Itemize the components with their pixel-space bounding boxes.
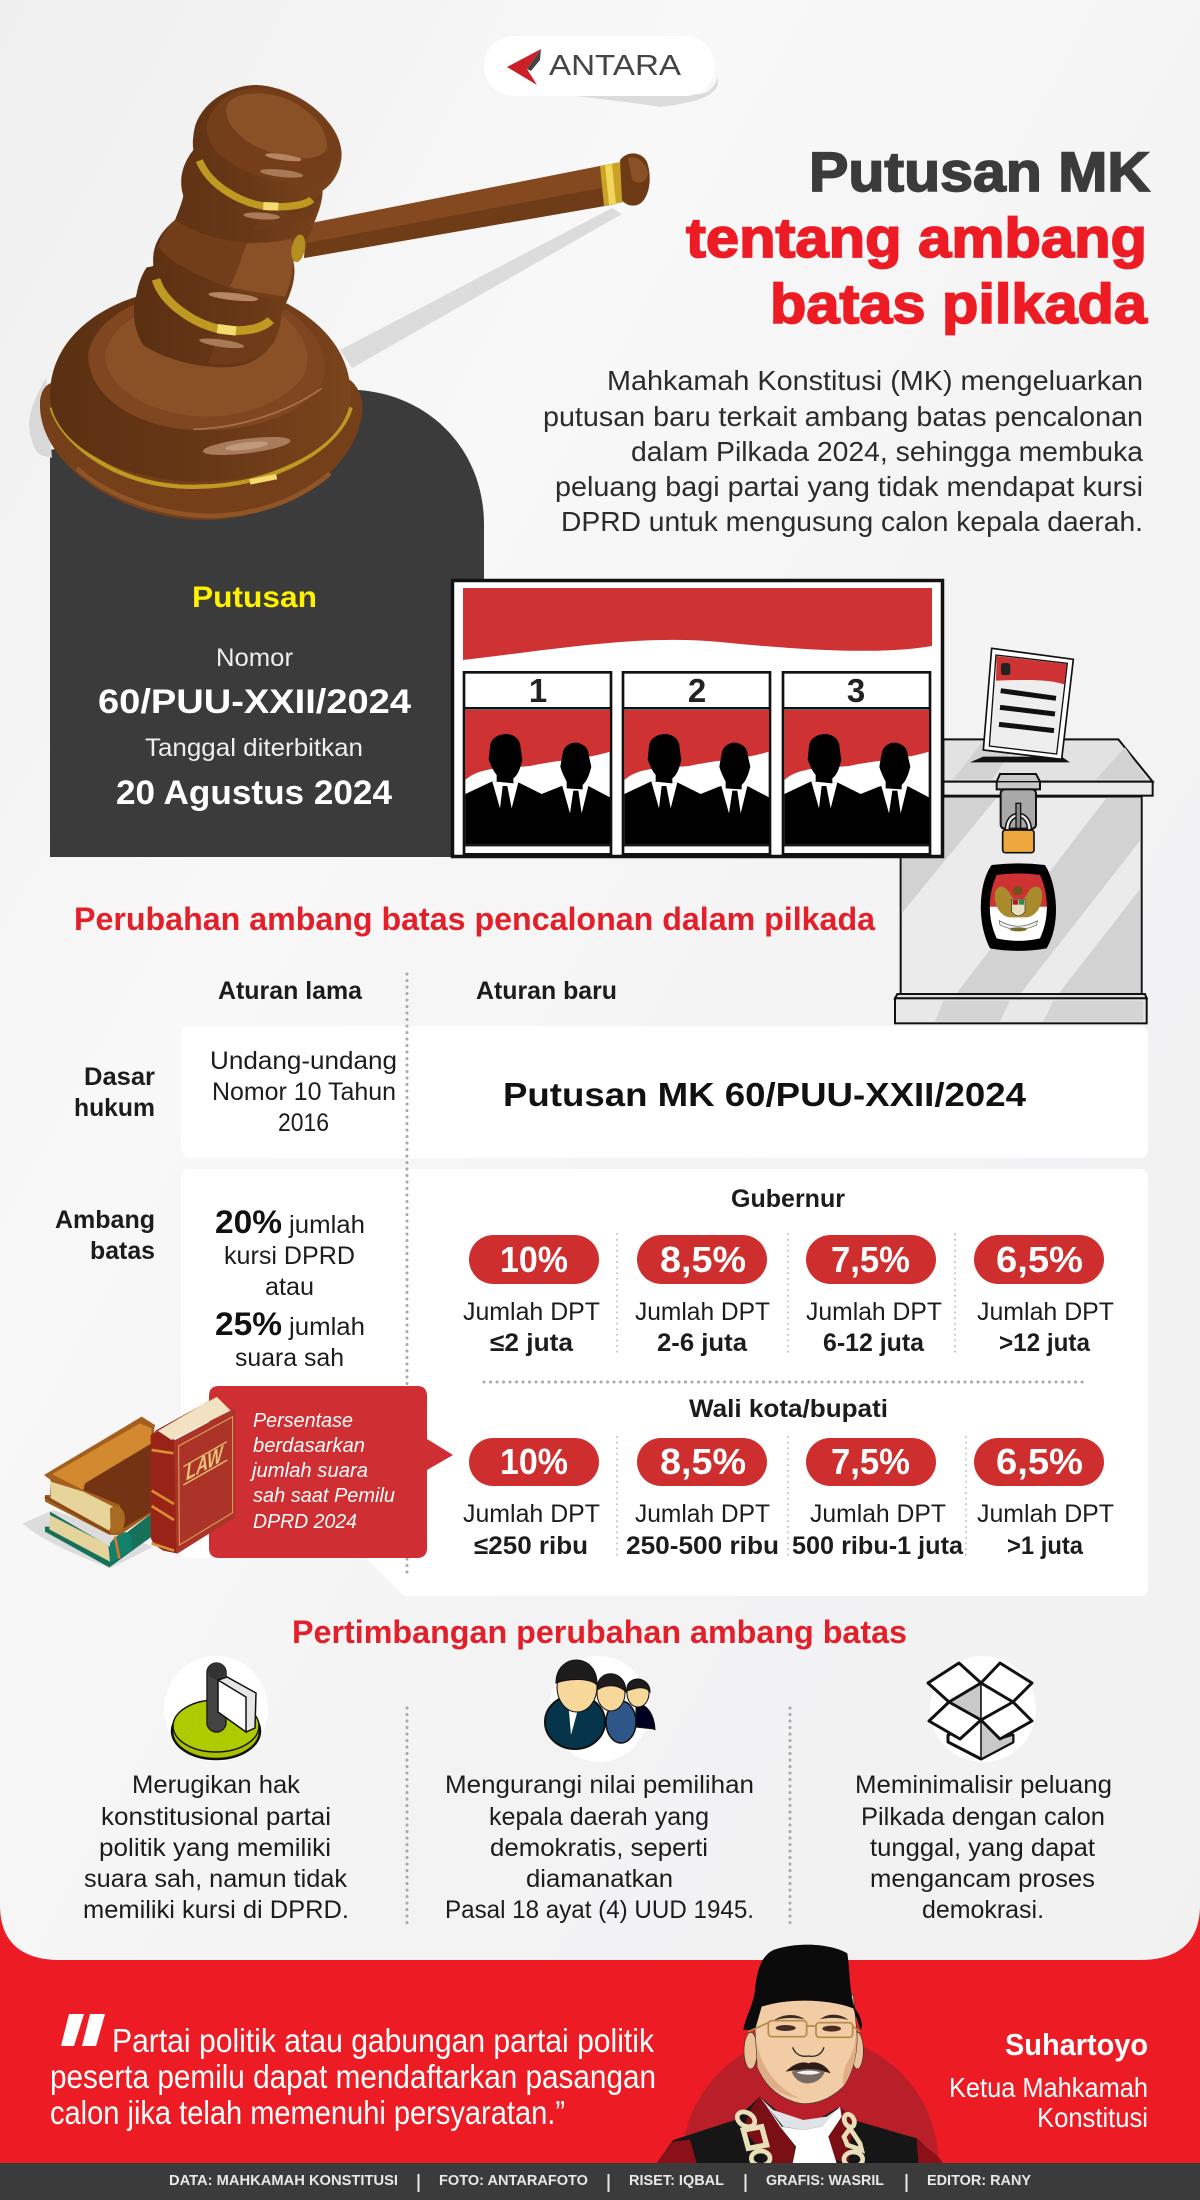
backdrop circle (684, 2046, 938, 2156)
candidate card 2 (623, 672, 770, 854)
chain of office (735, 2109, 863, 2167)
footer credits: GRAFIS: WASRIL (766, 2173, 884, 2189)
logo: ANTARA: ANTARA (549, 50, 682, 82)
label: Putusan: Putusan (192, 581, 317, 614)
candidate card 2: 2 (688, 672, 706, 709)
old threshold: 25% (215, 1306, 282, 1342)
brows and eyes (773, 2015, 848, 2032)
intro text: Mahkamah Konstitusi (MK) mengeluarkan (607, 365, 1143, 396)
voter labels: 2-6 juta (657, 1329, 748, 1357)
gavel base flange (40, 380, 363, 520)
label: date issued: Tanggal diterbitkan (145, 734, 363, 762)
row label: threshold (55, 1206, 155, 1265)
peci cap (743, 1945, 862, 2030)
logo: ANTARA (484, 36, 718, 107)
quote (50, 2022, 656, 2131)
ballot box lid (943, 739, 1153, 796)
red law book: LAW (186, 1440, 224, 1486)
row label: threshold: Ambang (55, 1206, 155, 1234)
reason 2: Pasal 18 ayat (4) UUD 1945. (445, 1896, 754, 1924)
icon: open box (928, 1656, 1036, 1762)
icon: gavel (40, 85, 650, 520)
old threshold: suara sah (235, 1344, 344, 1372)
gavel gold bands (156, 161, 312, 331)
title: Putusan MK (809, 140, 1150, 203)
intro text: DPRD untuk mengusung calon kepala daerah. (561, 506, 1143, 537)
reason 1: politik yang memiliki (99, 1834, 331, 1862)
reason 1 (83, 1771, 349, 1924)
intro text: dalam Pilkada 2024, sehingga membuka (631, 436, 1143, 467)
voter labels: Jumlah DPT (463, 1500, 600, 1528)
pill 10%: 10% (500, 1239, 568, 1280)
intro text: peluang bagi partai yang tidak mendapat kursi (555, 471, 1143, 502)
icon: quotation mark (61, 2014, 105, 2046)
gavel handle (304, 153, 650, 258)
pill 7,5%: 7,5% (831, 1441, 910, 1482)
reason 2: kepala daerah yang (489, 1803, 709, 1831)
pill 10%: 10% (500, 1441, 568, 1482)
book shadow (23, 1510, 153, 1568)
row label: legal basis: Dasar (84, 1063, 155, 1091)
title: batas pilkada (770, 272, 1148, 335)
heading: changes: Perubahan ambang batas pencalonan dalam pilkada (74, 901, 875, 937)
voter labels: Jumlah DPT (977, 1500, 1114, 1528)
new legal basis: Putusan MK 60/PUU-XXII/2024 (503, 1076, 1027, 1113)
quote: peserta pemilu dapat mendaftarkan pasangan (50, 2058, 656, 2095)
portrait: Suhartoyo (657, 1944, 943, 2163)
row label: legal basis (74, 1063, 155, 1122)
reason 2 (445, 1771, 754, 1924)
gavel head (134, 85, 342, 367)
icon: flag on disc (164, 1656, 268, 1762)
voter labels: Jumlah DPT (810, 1500, 946, 1528)
quote: calon jika telah memenuhi persyaratan.” (50, 2094, 565, 2131)
reason 3 (855, 1771, 1112, 1924)
quote: Partai politik atau gabungan partai politik (112, 2022, 654, 2059)
reason 1: suara sah, namun tidak (84, 1865, 347, 1893)
voter labels: 250-500 ribu (626, 1532, 779, 1560)
callout (209, 1386, 453, 1558)
old threshold: atau (265, 1273, 314, 1301)
green book (45, 1512, 152, 1567)
governor thresholds (463, 1235, 1114, 1357)
reason 3: demokrasi. (922, 1896, 1044, 1924)
table cards (181, 1026, 1148, 1596)
old legal basis: 2016 (278, 1109, 329, 1137)
voter labels: Jumlah DPT (977, 1298, 1114, 1326)
voter labels: Jumlah DPT (806, 1298, 942, 1326)
old threshold: jumlah (288, 1313, 365, 1341)
old threshold (215, 1204, 365, 1372)
pill 6,5%: 6,5% (996, 1441, 1083, 1482)
candidate card 1: 1 (529, 672, 547, 709)
footer credits: FOTO: ANTARAFOTO (439, 2173, 588, 2189)
voter labels: Jumlah DPT (635, 1298, 770, 1326)
title: tentang ambang (686, 206, 1147, 269)
pill 8,5%: 8,5% (660, 1239, 746, 1280)
garuda (995, 886, 1042, 931)
icon: law books (23, 1396, 235, 1568)
speaker role (949, 2072, 1148, 2133)
ears (744, 2032, 863, 2069)
voter labels: Jumlah DPT (635, 1500, 770, 1528)
reason 2: demokratis, seperti (490, 1834, 708, 1862)
icon: group of people (545, 1656, 655, 1762)
voter labels: >12 juta (999, 1329, 1091, 1357)
pill 6,5% (974, 1438, 1104, 1486)
old threshold: jumlah (288, 1211, 365, 1239)
candidate card 3 (783, 672, 930, 854)
heading: considerations: Pertimbangan perubahan ambang batas (292, 1614, 907, 1650)
pill 7,5% (806, 1438, 936, 1486)
intro text (543, 365, 1143, 537)
footer credits: EDITOR: RANY (927, 2173, 1031, 2189)
callout: berdasarkan (253, 1434, 365, 1457)
gavel top disc (207, 88, 340, 187)
voter labels (463, 1298, 1114, 1357)
subheading: mayor/regent: Wali kota/bupati (689, 1395, 888, 1423)
decision date: 20 Agustus 2024 (116, 774, 392, 812)
reason 3: Meminimalisir peluang (855, 1771, 1112, 1799)
callout: jumlah suara (249, 1459, 368, 1482)
row label: legal basis: hukum (74, 1094, 155, 1122)
ballot box base (895, 994, 1147, 1023)
voter labels: Jumlah DPT (463, 1298, 600, 1326)
speaker role: Konstitusi (1037, 2102, 1148, 2133)
pill 6,5% (974, 1235, 1104, 1284)
panel: red quote footer (0, 1905, 1200, 2170)
voter labels (463, 1500, 1114, 1560)
ballot paper (983, 648, 1073, 759)
ballot box body (901, 797, 1142, 995)
voter labels: ≤2 juta (490, 1329, 574, 1357)
pill 10% (469, 1235, 599, 1284)
gavel dome (50, 297, 351, 482)
pill 8,5% (637, 1235, 767, 1284)
title (686, 140, 1150, 335)
callout: sah saat Pemilu (253, 1484, 395, 1507)
pill 7,5%: 7,5% (831, 1239, 910, 1280)
callout: Persentase (253, 1409, 353, 1432)
candidate card 1 (464, 672, 611, 854)
ballot sheet (452, 580, 942, 856)
ballot box slot (970, 757, 1070, 762)
pill 7,5% (806, 1235, 936, 1284)
moustache and mouth (786, 2062, 831, 2083)
gavel gold ring (52, 407, 351, 487)
voter labels: >1 juta (1007, 1532, 1084, 1560)
old legal basis: Nomor 10 Tahun (212, 1078, 396, 1106)
robe (657, 2096, 943, 2163)
column heading: old rules: Aturan lama (218, 977, 363, 1005)
KPU emblem (980, 863, 1060, 951)
icon: gavel shadow (29, 208, 622, 458)
reason 1: konstitusional partai (101, 1803, 331, 1831)
label: Nomor: Nomor (216, 644, 293, 672)
voter labels: ≤250 ribu (474, 1532, 588, 1560)
reason 3: tunggal, yang dapat (870, 1834, 1095, 1862)
voter labels: 500 ribu-1 juta (792, 1532, 964, 1560)
pill 8,5% (637, 1438, 767, 1486)
reason 3: Pilkada dengan calon (861, 1803, 1105, 1831)
footer credits (0, 2163, 1200, 2200)
callout: DPRD 2024 (253, 1510, 357, 1533)
pill 10% (469, 1438, 599, 1486)
face (755, 1995, 857, 2104)
row label: threshold: batas (90, 1237, 155, 1265)
decision number: 60/PUU-XXII/2024 (98, 683, 411, 721)
reason 3: mengancam proses (870, 1865, 1095, 1893)
candidate card 3: 3 (847, 672, 865, 709)
mayor thresholds (463, 1438, 1114, 1560)
panel: putusan dark panel (50, 390, 484, 857)
reason 2: diamanatkan (526, 1865, 673, 1893)
pill 8,5%: 8,5% (660, 1441, 746, 1482)
icon: ballot box (895, 648, 1153, 1023)
old threshold: 20% (215, 1204, 282, 1240)
intro text: putusan baru terkait ambang batas pencalonan (543, 401, 1143, 432)
column heading: new rules: Aturan baru (476, 977, 617, 1005)
subheading: governor: Gubernur (731, 1185, 845, 1213)
old threshold: kursi DPRD (224, 1242, 355, 1270)
brown book (44, 1417, 155, 1535)
reason 1: memiliki kursi di DPRD. (83, 1896, 349, 1924)
footer credits: RISET: IQBAL (629, 2173, 724, 2189)
speaker name: Suhartoyo (1005, 2027, 1148, 2062)
nose (793, 2047, 824, 2056)
red law book (151, 1396, 235, 1554)
old legal basis (210, 1047, 397, 1137)
footer credits: DATA: MAHKAMAH KONSTITUSI (169, 2173, 398, 2189)
old legal basis: Undang-undang (210, 1047, 397, 1075)
ballot banner (463, 588, 932, 660)
reason 1: Merugikan hak (132, 1771, 301, 1799)
pill 6,5%: 6,5% (996, 1239, 1083, 1280)
speaker role: Ketua Mahkamah (949, 2072, 1148, 2103)
voter labels: 6-12 juta (823, 1329, 925, 1357)
glasses (748, 2021, 860, 2037)
reason 2: Mengurangi nilai pemilihan (445, 1771, 754, 1799)
padlock (997, 774, 1040, 853)
